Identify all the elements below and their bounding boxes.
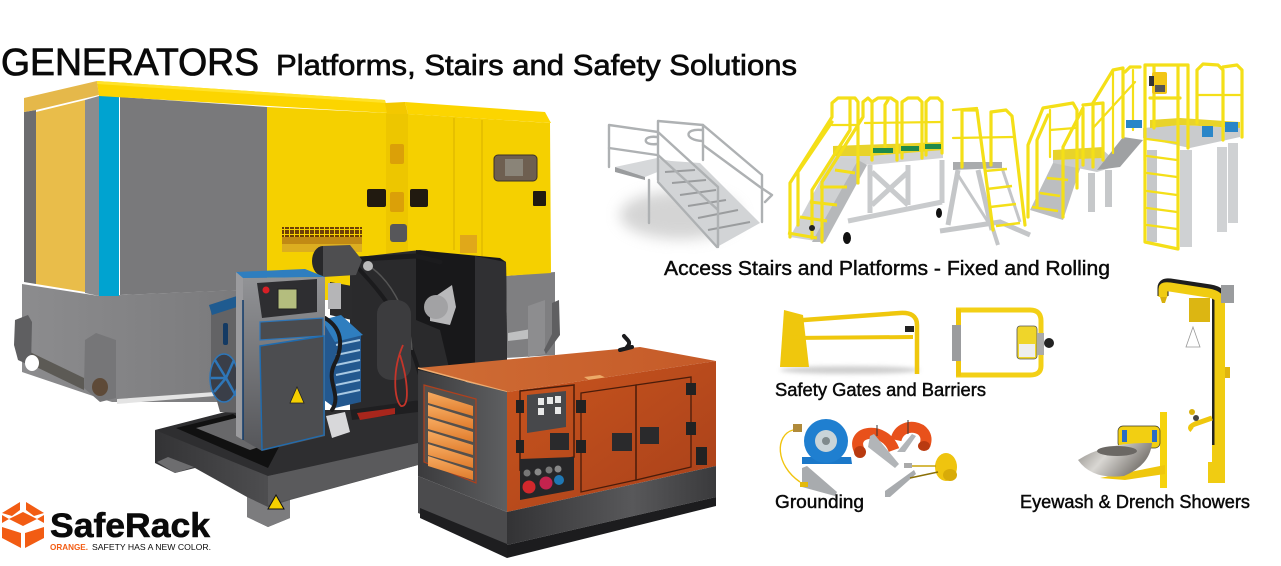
deck and treads bbox=[615, 158, 760, 247]
SafeRack logo bbox=[2, 502, 211, 552]
stair sections and decks bbox=[1030, 118, 1240, 220]
deck bbox=[833, 145, 943, 165]
large yellow generator bbox=[14, 81, 560, 404]
blue safety labels bbox=[1126, 120, 1238, 137]
side and end panels bbox=[24, 96, 551, 300]
green safety labels bbox=[873, 144, 941, 153]
base skid bbox=[14, 272, 560, 404]
base plinth bbox=[507, 466, 716, 558]
front orange panel bbox=[507, 361, 716, 512]
exhaust cap bbox=[620, 336, 632, 350]
guard rails bbox=[1028, 64, 1242, 217]
tagline: SAFETY HAS A NEW COLOR. bbox=[92, 542, 211, 552]
service doors bbox=[516, 377, 707, 492]
yellow crossover platform with ladder bbox=[1028, 64, 1242, 249]
air filter bbox=[312, 245, 373, 277]
wordmark: SafeRack bbox=[50, 507, 210, 545]
eyewash station bbox=[1078, 412, 1167, 488]
title bbox=[1, 42, 797, 84]
roof bbox=[24, 81, 551, 123]
stairs bbox=[790, 157, 867, 242]
blue radiator vent bbox=[322, 315, 363, 408]
base frame bbox=[155, 400, 418, 527]
rails bbox=[790, 98, 942, 242]
subtitle: Platforms, Stairs and Safety Solutions bbox=[276, 50, 797, 82]
orange enclosed generator bbox=[418, 336, 716, 558]
yellow rolling ladder bbox=[940, 108, 1030, 245]
support legs bbox=[1088, 143, 1238, 247]
swing barrier gate bbox=[780, 310, 920, 374]
warning label on cabinet bbox=[290, 387, 304, 403]
left side panel bbox=[418, 370, 507, 558]
tread nosings bbox=[788, 170, 855, 238]
orange coiled cables and clamps bbox=[854, 420, 930, 468]
door latches and controller bbox=[367, 144, 546, 253]
icon: orange crate bbox=[2, 502, 44, 548]
casters bbox=[809, 208, 942, 244]
yellow coiled cable and clamps bbox=[885, 453, 957, 497]
label: access stairs: Access Stairs and Platforms - Fixed and Rolling bbox=[664, 258, 1110, 280]
steel frame bbox=[848, 160, 942, 221]
yellow safety gate box bbox=[1149, 72, 1167, 94]
ladder rails bbox=[953, 108, 1025, 230]
title: GENERATORS bbox=[1, 42, 259, 84]
tagline: ORANGE. bbox=[50, 542, 88, 552]
open engine generator set bbox=[155, 245, 507, 527]
yellow rolling stair platform bbox=[788, 98, 943, 244]
control cabinet bbox=[236, 269, 325, 451]
hose bbox=[325, 318, 340, 410]
exhaust clamp bbox=[326, 412, 350, 438]
stair shadow bbox=[620, 191, 740, 239]
drench shower bbox=[1160, 284, 1234, 483]
label: safety gates: Safety Gates and Barriers bbox=[775, 380, 986, 400]
louvre vent bbox=[424, 385, 476, 483]
gray aluminium stair platform bbox=[609, 121, 772, 247]
ventilation grille bbox=[282, 227, 362, 252]
ladder frame bbox=[940, 162, 1030, 245]
alternator and fan bbox=[209, 296, 240, 413]
label: eyewash: Eyewash & Drench Showers bbox=[1020, 492, 1250, 512]
railings bbox=[609, 121, 772, 247]
gate floor shadow bbox=[780, 366, 920, 374]
grounding reel with clamp bbox=[780, 419, 852, 496]
self-closing safety gate bbox=[952, 309, 1054, 376]
control section bbox=[520, 385, 574, 500]
enclosure top bbox=[418, 347, 716, 392]
access ladder bbox=[1145, 120, 1178, 249]
engine block bbox=[328, 250, 507, 410]
warning label on base bbox=[268, 495, 284, 509]
label: grounding: Grounding bbox=[775, 492, 864, 512]
